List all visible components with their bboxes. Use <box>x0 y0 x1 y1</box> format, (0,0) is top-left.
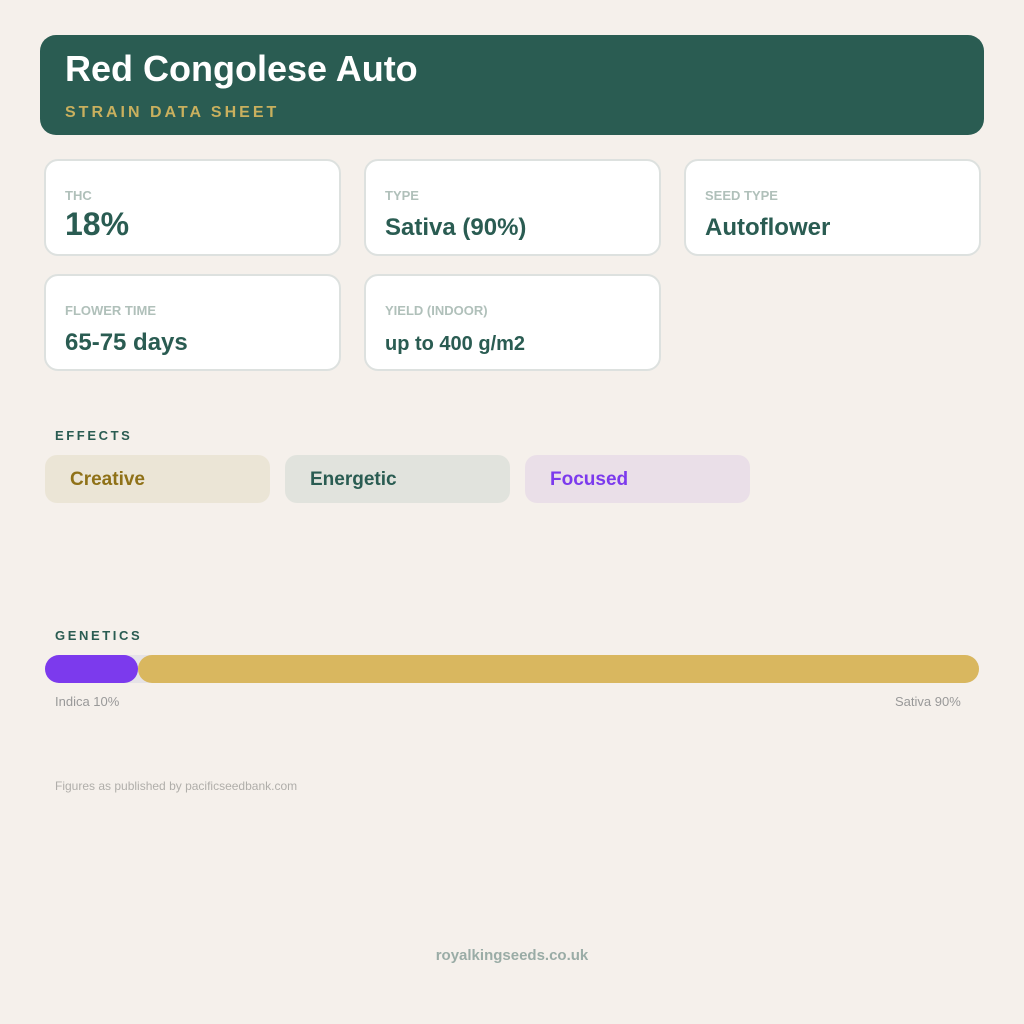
source note: Figures as published by pacificseedbank.com <box>55 779 297 793</box>
card: type <box>364 159 661 256</box>
value: autoflower: Autoflower <box>705 214 830 241</box>
effects heading: EFFECTS <box>55 428 132 443</box>
effect pill: creative: Creative <box>70 469 145 490</box>
label: type: TYPE <box>385 188 419 203</box>
sativa segment <box>138 655 979 683</box>
genetics bar <box>45 655 979 683</box>
effect pill: focused: Focused <box>550 469 628 490</box>
card: flower time <box>44 274 341 371</box>
label: flower time: FLOWER TIME <box>65 303 156 318</box>
subtitle: STRAIN DATA SHEET <box>65 104 279 121</box>
value: 18%: 18% <box>65 206 129 242</box>
card: THC <box>44 159 341 256</box>
card: seed type <box>684 159 981 256</box>
title: Red Congolese Auto <box>65 48 418 89</box>
effect pill: focused <box>525 455 750 503</box>
value: flower time: 65-75 days <box>65 329 188 356</box>
label: seed type: SEED TYPE <box>705 188 778 203</box>
card: yield <box>364 274 661 371</box>
header banner <box>40 35 984 135</box>
label: THC: THC <box>65 188 92 203</box>
sativa label: Sativa 90% <box>895 694 961 709</box>
indica segment <box>45 655 138 683</box>
footer website: royalkingseeds.co.uk <box>436 947 588 964</box>
label: yield: YIELD (INDOOR) <box>385 303 488 318</box>
effect pill: energetic <box>285 455 510 503</box>
effect pill: creative <box>45 455 270 503</box>
genetics heading: GENETICS <box>55 628 142 643</box>
indica label: Indica 10% <box>55 694 119 709</box>
effect pill: energetic: Energetic <box>310 469 397 490</box>
value: sativa: Sativa (90%) <box>385 214 526 241</box>
value: yield: up to 400 g/m2 <box>385 333 525 355</box>
